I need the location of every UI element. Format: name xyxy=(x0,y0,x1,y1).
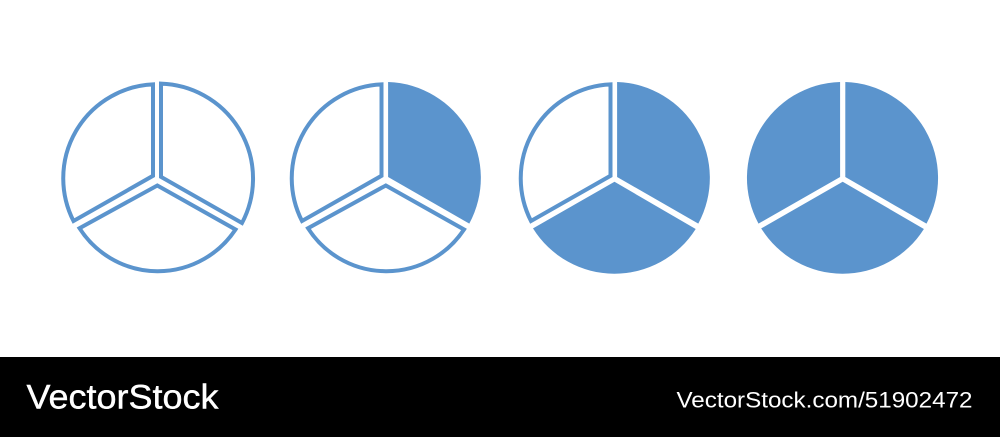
pie: one of three sectors filled xyxy=(292,82,481,271)
pie: two of three sectors filled xyxy=(521,82,710,274)
footer band xyxy=(0,357,1000,437)
pie: all three sectors filled xyxy=(747,82,938,274)
logo wordmark: VectorStock xyxy=(26,378,219,416)
pie: one third outline, none filled xyxy=(63,84,253,271)
image URL: VectorStock.com/51902472 xyxy=(676,388,972,412)
